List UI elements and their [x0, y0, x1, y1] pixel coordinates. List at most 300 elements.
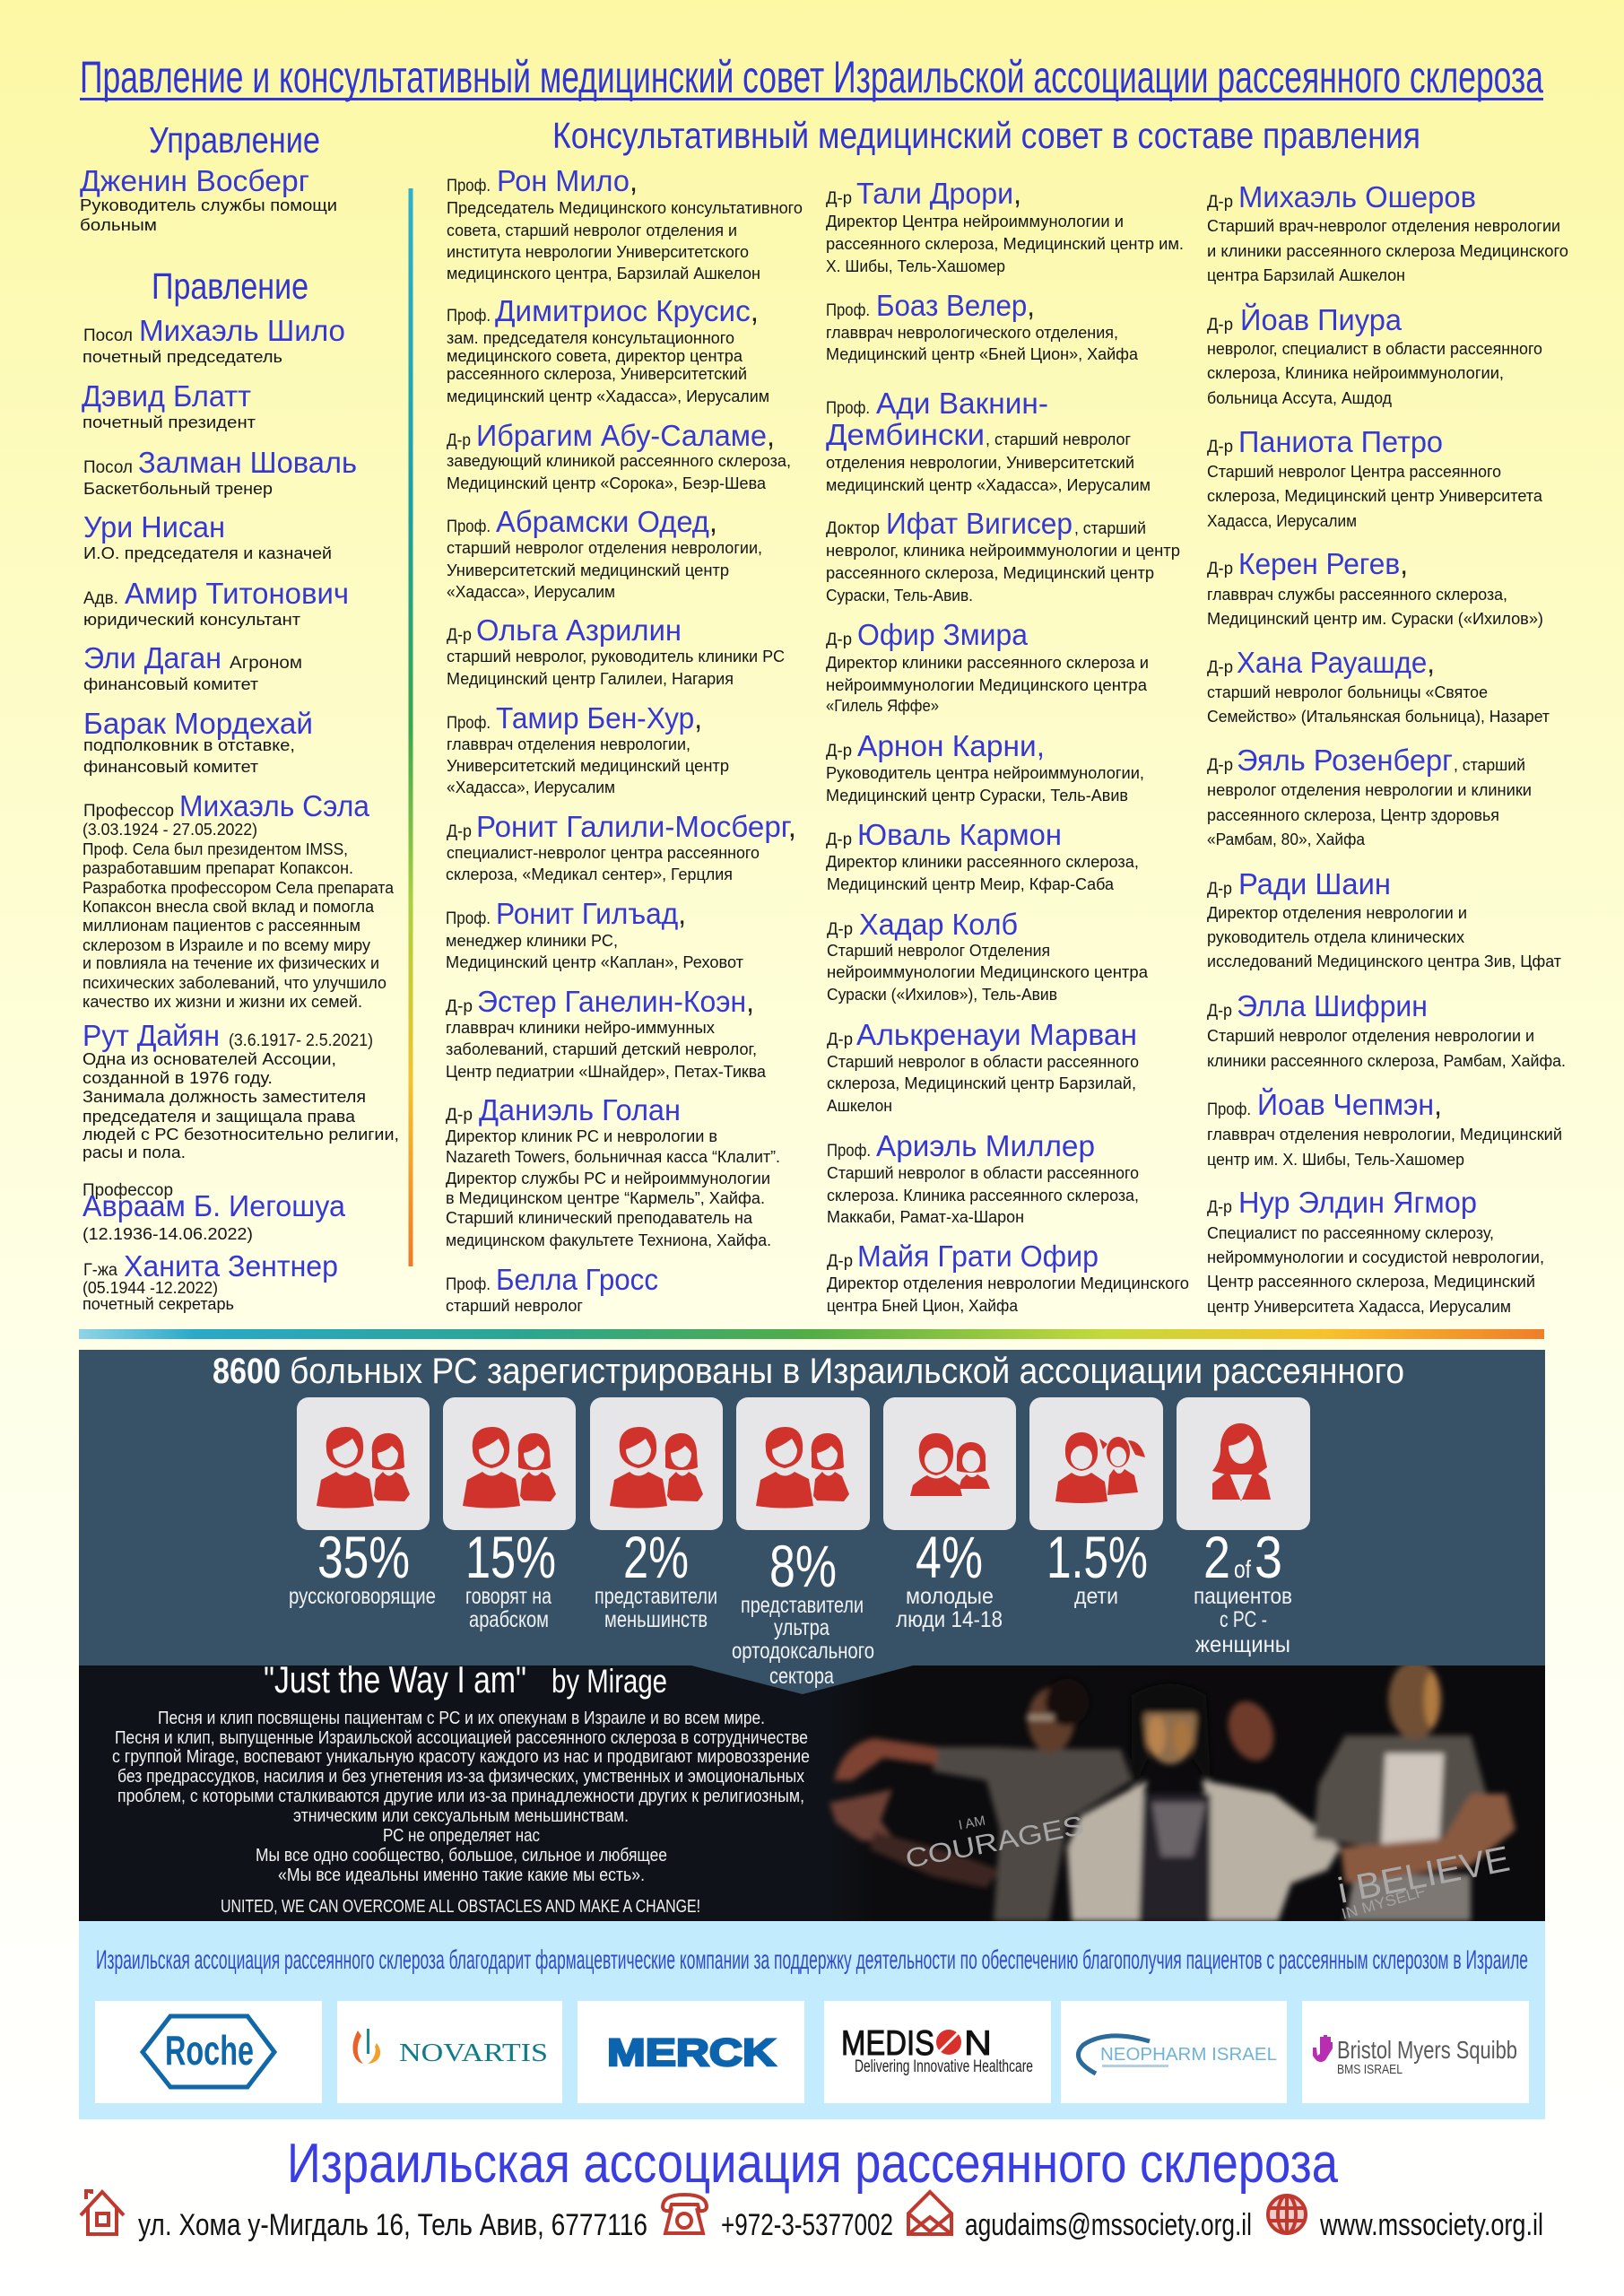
member: Михаэль Шило: Михаэль Шило [139, 314, 345, 347]
member: Ронит Галили-Мосберг: Ронит Галили-Мосберг, [476, 810, 796, 843]
member: Амир Титонович: Адв. [83, 589, 118, 608]
member: Михаэль Ошеров: Михаэль Ошеров [1238, 180, 1476, 213]
member: Ифат Вигисер: невролог, клиника нейроиммунологии и центр [826, 541, 1180, 560]
member: Элла Шифрин: Элла Шифрин [1237, 989, 1428, 1022]
member: Алькренауи Марван: склероза, Медицинский центр Барзилай, [827, 1074, 1136, 1092]
logo: Merck: MERCK [607, 2031, 776, 2074]
member: Эяль Розенберг: рассеянного склероза, Центр здоровья [1207, 805, 1499, 824]
member: Абрамски Одед: Абрамски Одед, [496, 505, 717, 538]
member: Ольга Азрилин: Д-р [447, 626, 472, 645]
member: Михаэль Ошеров: Д-р [1207, 193, 1233, 212]
member: Димитриос Крусис: зам. председателя консультационного [447, 328, 734, 347]
member: Паниота Петро: Д-р [1207, 438, 1233, 457]
member: Эстер Ганелин-Коэн: Д-р [446, 997, 473, 1016]
song description: UNITED, WE CAN OVERCOME ALL OBSTACLES AND MAKE A CHANGE! [221, 1897, 700, 1917]
logo: Neopharm Israel [1061, 2001, 1287, 2103]
member: Абрамски Одед: «Хадасса», Иерусалим [447, 582, 615, 601]
stat: 2 of 3 women: 2 [1203, 1524, 1230, 1590]
stat: 2% minorities: 2% [623, 1524, 689, 1590]
member: Керен Регев: Д-р [1207, 560, 1233, 578]
photo: three singers on stage: COURAGES [903, 1811, 1087, 1874]
member: Эяль Розенберг: «Рамбам, 80», Хайфа [1207, 830, 1366, 848]
member: Ради Шаин: руководитель отдела клинических [1207, 927, 1465, 946]
member: Ифат Вигисер: рассеянного склероза, Медицинский центр [826, 563, 1154, 582]
member: Ханита Зентнер: (05.1944 -12.2022) [83, 1278, 218, 1297]
member: Паниота Петро [1207, 425, 1543, 530]
stat: 2 of 3 women: of [1234, 1555, 1251, 1583]
member: Дженин Восберг: больным [80, 215, 157, 234]
member: Эстер Ганелин-Коэн [446, 985, 767, 1081]
member: Ради Шаин: исследований Медицинского центра Зив, Цфат [1207, 952, 1561, 970]
member: Майя Грати Офир: Директор отделения неврологии Медицинского [827, 1274, 1189, 1292]
member: Михаэль Ошеров: и клиники рассеянного склероза Медицинского [1207, 241, 1568, 260]
photo: three singers on stage: IN MYSELF [1340, 1883, 1427, 1923]
member: Залман Шоваль: Залман Шоваль [138, 446, 357, 479]
song description: Мы все одно сообщество, большое, сильное и любящее [256, 1846, 667, 1866]
member: Тамир Бен-Хур [447, 701, 729, 796]
member: Ольга Азрилин: старший невролог, руководитель клиники РС [447, 647, 785, 665]
member: Офир Змира: Д-р [826, 631, 852, 649]
logo: Neopharm Israel: NEOPHARM ISRAEL [1100, 2045, 1277, 2065]
icon: house [81, 2191, 124, 2234]
panel: dark video section [79, 1658, 1545, 1923]
song description: «Мы все идеальны именно такие какие мы есть». [278, 1866, 645, 1885]
member: Офир Змира: нейроиммунологии Медицинского центра [826, 675, 1148, 694]
song description: Песня и клип, выпущенные Израильской ассоциацией рассеянного склероза в сотрудничестве [115, 1728, 808, 1748]
member: Офир Змира: Директор клиники рассеянного склероза и [826, 653, 1149, 672]
member: Йоав Пиура: невролог, специалист в области рассеянного [1207, 339, 1542, 358]
address: ул. Хома у-Мигдаль 16, Тель Авив, 6777116 [138, 2208, 647, 2242]
member: Ронит Гилъад: менеджер клиники РС, [446, 931, 618, 950]
stat: 35% russian speakers: русскоговорящие [289, 1584, 436, 1609]
member: Залман Шоваль [83, 446, 357, 498]
member: Ифат Вигисер: Доктор [826, 519, 880, 538]
panel: sponsors [79, 1921, 1545, 2119]
panel: council column 3 [1207, 180, 1568, 1316]
member: Ифат Вигисер: Сураски, Тель-Авив. [826, 586, 973, 604]
stat: 15% arabic speakers [443, 1397, 576, 1632]
member: Даниэль Голан [446, 1093, 780, 1249]
member: Ибрагим Абу-Саламе [447, 419, 791, 492]
email: agudaims@mssociety.org.il [965, 2208, 1252, 2242]
member: Хана Рауашде: Семейство» (Итальянская больница), Назарет [1207, 707, 1550, 726]
member: Ради Шаин: Директор отделения неврологии и [1207, 903, 1467, 922]
member: Йоав Пиура [1207, 303, 1542, 407]
logo: Novartis [337, 2001, 562, 2103]
member: Элла Шифрин: Старший невролог отделения неврологии и [1207, 1026, 1534, 1045]
member: Эяль Розенберг: Д-р [1207, 756, 1233, 775]
member: Тамир Бен-Хур: главврач отделения неврологии, [447, 735, 690, 753]
stat: 2% minorities [590, 1397, 723, 1632]
member: Тали Дрори: Тали Дрори, [856, 177, 1021, 210]
member: Боаз Велер: Боаз Велер, [876, 289, 1035, 322]
member: Рут Дайян: (3.6.1917- 2.5.2021) [229, 1031, 373, 1050]
stat: 8% ultra-orthodox: сектора [769, 1664, 834, 1689]
member: Хадар Колб: Старший невролог Отделения [827, 941, 1050, 960]
stat: 8% ultra-orthodox: представители [741, 1593, 864, 1618]
member: Алькренауи Марван: Ашкелон [827, 1096, 892, 1115]
member: Арнон Карни: Медицинский центр Сураски, Тель-Авив [826, 786, 1128, 804]
member: Майя Грати Офир: Д-р [827, 1252, 853, 1271]
member: Нур Элдин Ягмор: Центр рассеянного склероза, Медицинский [1207, 1272, 1535, 1291]
member: Нур Элдин Ягмор: Д-р [1207, 1198, 1232, 1217]
member: Хадар Колб: Хадар Колб [859, 908, 1018, 941]
member: Арнон Карни [826, 729, 1144, 804]
member: Паниота Петро: Старший невролог Центра рассеянного [1207, 462, 1501, 481]
member: Тали Дрори [826, 177, 1184, 275]
member: Михаэль Сэла: качество их жизни и жизни их семей. [83, 992, 362, 1011]
stat: 4% young people: люди 14-18 [896, 1607, 1003, 1632]
member: Дэвид Блатт: почетный президент [83, 413, 256, 431]
stat: 2 of 3 women: пациентов [1194, 1584, 1292, 1609]
member: Белла Гросс: старший невролог [446, 1296, 583, 1315]
stat: 4% young people [883, 1397, 1016, 1632]
song title: by Mirage [551, 1663, 667, 1700]
member: Ольга Азрилин: Ольга Азрилин [476, 613, 682, 647]
member: Димитриос Крусис [447, 294, 769, 405]
member: Боаз Велер: Медицинский центр «Бней Цион», Хайфа [826, 344, 1139, 363]
photo: three singers on stage: i BELIEVE [1334, 1839, 1513, 1911]
member: Даниэль Голан: Даниэль Голан [479, 1093, 681, 1126]
member: Ради Шаин: Ради Шаин [1238, 867, 1391, 900]
stat: 15% arabic speakers: говорят на [465, 1584, 551, 1609]
member: Ольга Азрилин: Медицинский центр Галилеи, Нагария [447, 669, 734, 688]
member: Ариэль Миллер: Проф. [827, 1142, 871, 1161]
logo: Medison: Delivering Innovative Healthcare [855, 2057, 1033, 2076]
member: Барак Мордехай [83, 707, 313, 776]
member: Амир Титонович: юридический консультант [83, 610, 301, 629]
logo: Bristol Myers Squibb [1302, 2001, 1529, 2103]
member: Ури Нисан: И.О. председателя и казначей [83, 544, 332, 562]
member: Тамир Бен-Хур: «Хадасса», Иерусалим [447, 778, 615, 796]
member: Йоав Чепмэн: главврач отделения неврологии, Медицинский [1207, 1125, 1562, 1144]
footer title: Израильская ассоциация рассеянного склероза [287, 2133, 1338, 2195]
member: Йоав Пиура: больница Ассута, Ашдод [1207, 388, 1392, 407]
member: Михаэль Сэла: разработавшим препарат Копаксон. [83, 858, 353, 877]
member: Ронит Галили-Мосберг: Д-р [447, 822, 472, 841]
stat: 4% young people: молодые [906, 1584, 994, 1609]
member: Йоав Пиура: Д-р [1207, 316, 1233, 335]
member: Авраам Б. Иегошуа: Авраам Б. Иегошуа [83, 1189, 346, 1222]
member: Рут Дайян: расы и пола. [83, 1143, 186, 1161]
stat: 1.5% children: дети [1074, 1584, 1118, 1609]
member: Михаэль Шило: Посол [83, 326, 133, 345]
member: Эстер Ганелин-Коэн: Центр педиатрии «Шнайдер», Петах-Тиква [446, 1062, 767, 1081]
member: Ронит Галили-Мосберг [446, 810, 796, 883]
member: Керен Регев: Керен Регев, [1238, 547, 1408, 580]
panel: statistics [79, 1350, 1545, 1694]
member: Белла Гросс [446, 1263, 658, 1315]
stat: 1.5% children [1029, 1397, 1163, 1609]
member: Паниота Петро: Паниота Петро [1238, 425, 1443, 458]
member: Эли Даган [83, 641, 302, 693]
member: Тали Дрори: Х. Шибы, Тель-Хашомер [826, 257, 1005, 275]
member: Ифат Вигисер [826, 507, 1180, 604]
logo: Medison: MEDIS [841, 2024, 934, 2063]
member: Ади Вакнин-Дембински: Ади Вакнин- [876, 387, 1048, 420]
member: Белла Гросс: Проф. [446, 1275, 491, 1294]
stat: 2% minorities: меньшинств [604, 1607, 708, 1632]
member: Офир Змира: «Гилель Яффе» [826, 696, 939, 715]
member: Эли Даган: Эли Даган [83, 641, 221, 674]
member: Эяль Розенберг: , старший [1454, 755, 1525, 774]
logo: Roche: Roche [165, 2027, 254, 2074]
member: Авраам Б. Иегошуа [83, 1181, 346, 1243]
icon: telephone [663, 2195, 707, 2233]
panel: council column 1 [446, 164, 803, 1315]
member: Нур Элдин Ягмор: центр Университета Хадасса, Иерусалим [1207, 1297, 1511, 1316]
member: Ади Вакнин-Дембински: Дембински [826, 418, 985, 451]
heading: medical advisory council: Консультативный медицинский совет в составе правления [552, 115, 1420, 156]
member: Эяль Розенберг: невролог отделения неврологии и клиники [1207, 780, 1532, 799]
member: Амир Титонович: Амир Титонович [125, 577, 349, 610]
logo: Medison: N [964, 2024, 992, 2063]
member: Арнон Карни: Д-р [826, 742, 852, 761]
member: Рут Дайян [83, 1019, 399, 1161]
member: Боаз Велер: главврач неврологического отделения, [826, 323, 1118, 342]
member: Ронит Галили-Мосберг: специалист-невролог центра рассеянного [447, 843, 760, 862]
member: Дженин Восберг [80, 164, 337, 234]
panel: management column [80, 119, 399, 1313]
member: Ариэль Миллер: Маккаби, Рамат-ха-Шарон [827, 1207, 1024, 1226]
member: Абрамски Одед: Проф. [447, 517, 491, 536]
stat: 35% russian speakers: 35% [317, 1524, 410, 1590]
member: Паниота Петро: Хадасса, Иерусалим [1207, 511, 1357, 530]
member: Хадар Колб: Д-р [827, 920, 853, 939]
member: Ади Вакнин-Дембински: отделения неврологии, Университетский [826, 453, 1134, 472]
member: Тали Дрори: Д-р [826, 189, 852, 208]
member: Димитриос Крусис: Проф. [447, 307, 491, 326]
member: Эстер Ганелин-Коэн: Эстер Ганелин-Коэн, [477, 985, 754, 1018]
member: Офир Змира: Офир Змира [857, 618, 1029, 651]
member: Йоав Пиура: склероза, Клиника нейроиммунологии, [1207, 363, 1504, 382]
member: Арнон Карни: Арнон Карни, [857, 729, 1045, 762]
member: Йоав Чепмэн: Йоав Чепмэн, [1257, 1088, 1442, 1121]
member: Алькренауи Марван: Д-р [827, 1031, 853, 1049]
member: Даниэль Голан: Директор клиник РС и неврологии в [446, 1126, 717, 1145]
member: Хадар Колб: Сураски («Ихилов»), Тель-Авив [827, 985, 1057, 1004]
stat: 2 of 3 women: женщины [1195, 1632, 1290, 1657]
member: Нур Элдин Ягмор: нейроммунологии и сосудистой неврологии, [1207, 1248, 1544, 1266]
member: Рут Дайян: Одна из основателей Ассоции, [83, 1049, 336, 1068]
member: Керен Регев: главврач службы рассеянного склероза, [1207, 585, 1507, 604]
member: Офир Змира [826, 618, 1149, 715]
member: Юваль Кармон: Медицинский центр Меир, Кфар-Саба [827, 874, 1115, 893]
stat: 2 of 3 women: с РС - [1220, 1607, 1267, 1632]
member: Юваль Кармон [826, 818, 1139, 893]
member: Эли Даган: Агроном [230, 654, 302, 673]
member: Юваль Кармон: Д-р [826, 831, 852, 849]
footer contacts [81, 2191, 1543, 2242]
member: Рон Мило: Председатель Медицинского консультативного [447, 198, 803, 217]
member: Абрамски Одед [447, 505, 762, 601]
member: Белла Гросс: Белла Гросс [496, 1263, 658, 1296]
stat: 1.5% children: 1.5% [1046, 1524, 1148, 1590]
member: Рут Дайян: созданной в 1976 году. [83, 1068, 273, 1087]
member: Боаз Велер: Проф. [826, 301, 870, 320]
member: Даниэль Голан: в Медицинском центре “Кармель”, Хайфа. [446, 1188, 765, 1207]
member: Михаэль Сэла: психических заболеваний, что улучшило [83, 973, 386, 992]
member: Ханита Зентнер: Г-жа [83, 1261, 117, 1280]
website: www.mssociety.org.il [1319, 2208, 1543, 2242]
member: Михаэль Ошеров: Старший врач-невролог отделения неврологии [1207, 216, 1560, 235]
member: Рут Дайян: Рут Дайян [83, 1019, 220, 1052]
member: Рут Дайян: Занимала должность заместителя [83, 1087, 366, 1106]
member: Ибрагим Абу-Саламе: Д-р [447, 431, 471, 450]
member: Даниэль Голан: Д-р [446, 1106, 473, 1125]
member: Димитриос Крусис: рассеянного склероза, Университетский [447, 364, 747, 383]
member: Ади Вакнин-Дембински: Проф. [826, 399, 870, 418]
member: Амир Титонович [83, 577, 349, 629]
member: Рон Мило [447, 164, 803, 283]
member: Ариэль Миллер [827, 1129, 1139, 1226]
member: Ибрагим Абу-Саламе: Медицинский центр «Сорока», Беэр-Шева [447, 474, 767, 492]
stat: 8% ultra-orthodox: ультра [774, 1615, 829, 1640]
member: Ронит Гилъад: Проф. [446, 909, 491, 928]
member: Йоав Чепмэн [1207, 1088, 1562, 1169]
member: Михаэль Сэла: миллионам пациентов с рассеянным [83, 916, 360, 935]
member: Эяль Розенберг [1207, 744, 1532, 848]
stats heading: больных РС зарегистрированы в Израильской ассоциации рассеянного [290, 1352, 1404, 1391]
song description: с группой Mirage, воспевают уникальную красоту каждого из нас и продвигают мировоззрение [112, 1747, 810, 1767]
member: Ронит Гилъад: Ронит Гилъад, [496, 897, 686, 930]
icon: envelope [908, 2192, 951, 2234]
icon: young people [910, 1433, 990, 1496]
member: Рон Мило: медицинского центра, Барзилай Ашкелон [447, 264, 760, 283]
member: Даниэль Голан: Nazareth Towers, больничная касса “Клалит”. [446, 1147, 780, 1166]
song description: этническим или сексуальным меньшинствам. [293, 1806, 629, 1826]
member: Тали Дрори: рассеянного склероза, Медицинский центр им. [826, 234, 1184, 253]
member: Йоав Чепмэн: центр им. Х. Шибы, Тель-Хашомер [1207, 1150, 1464, 1169]
member: Тали Дрори: Директор Центра нейроиммунологии и [826, 212, 1124, 230]
member: Михаэль Шило: почетный председатель [83, 347, 282, 366]
member: Элла Шифрин [1207, 989, 1566, 1070]
member: Михаэль Сэла: и повлияла на течение их физических и [83, 953, 379, 972]
member: Ариэль Миллер: Ариэль Миллер [876, 1129, 1095, 1162]
member: Ибрагим Абу-Саламе: заведующий клиникой рассеянного склероза, [447, 451, 791, 470]
member: Димитриос Крусис: медицинского совета, директор центра [447, 346, 743, 365]
member: Михаэль Сэла [83, 789, 395, 1011]
member: Ронит Гилъад: Медицинский центр «Каплан», Реховот [446, 952, 744, 971]
stat: 8% ultra-orthodox: 8% [769, 1533, 837, 1599]
member: Хана Рауашде: старший невролог больницы «Святое [1207, 683, 1488, 701]
member: Ханита Зентнер: Ханита Зентнер [124, 1249, 338, 1283]
member: Барак Мордехай: подполковник в отставке, [83, 735, 295, 754]
member: Ради Шаин: Д-р [1207, 880, 1232, 899]
member: Тамир Бен-Хур: Университетский медицинский центр [447, 756, 729, 775]
member: Дженин Восберг: Руководитель службы помощи [80, 196, 337, 214]
member: Ронит Гилъад [446, 897, 744, 971]
stat: 4% young people: 4% [916, 1524, 983, 1590]
song description: РС не определяет нас [383, 1826, 540, 1846]
member: Рут Дайян: людей с РС безотносительно религии, [83, 1125, 399, 1144]
member: Боаз Велер [826, 289, 1139, 363]
phone number: +972-3-5377002 [721, 2208, 893, 2242]
photo: three singers on stage [825, 1660, 1545, 1923]
member: Юваль Кармон: Директор клиники рассеянного склероза, [826, 852, 1139, 871]
stats heading: 8600 [213, 1352, 281, 1391]
member: Ифат Вигисер: , старший [1074, 518, 1146, 537]
photo: three singers on stage: I AM [958, 1813, 986, 1833]
member: Ронит Галили-Мосберг: склероза, «Медикал сентер», Герцлия [446, 865, 733, 883]
member: Михаэль Сэла: Разработка профессором Села препарата [83, 878, 395, 897]
member: Авраам Б. Иегошуа: Профессор [83, 1181, 173, 1200]
member: Элла Шифрин: клиники рассеянного склероза, Рамбам, Хайфа. [1207, 1051, 1566, 1070]
member: Михаэль Сэла: Михаэль Сэла [179, 789, 370, 822]
song description: Песня и клип посвящены пациентам с РС и их опекунам в Израиле и во всем мире. [158, 1709, 765, 1728]
member: Рон Мило: совета, старший невролог отделения и [447, 221, 737, 239]
member: Керен Регев [1207, 547, 1543, 628]
member: Михаэль Сэла: Копаксон внесла свой вклад и помогла [83, 897, 375, 916]
icon: globe [1268, 2196, 1306, 2233]
stat: 8% ultra-orthodox [732, 1397, 874, 1689]
member: Даниэль Голан: медицинском факультете Техниона, Хайфа. [446, 1231, 771, 1249]
member: Ади Вакнин-Дембински [826, 387, 1151, 494]
stat: 2 of 3 women: 3 [1255, 1524, 1282, 1590]
member: Дэвид Блатт [82, 379, 256, 431]
member: Эяль Розенберг: Эяль Розенберг [1237, 744, 1453, 777]
member: Майя Грати Офир: Майя Грати Офир [857, 1239, 1099, 1273]
logo: Bristol Myers Squibb: BMS ISRAEL [1337, 2062, 1403, 2077]
stat: 15% arabic speakers: 15% [465, 1524, 556, 1590]
member: Алькренауи Марван: Старший невролог в области рассеянного [827, 1052, 1139, 1071]
member: Дэвид Блатт: Дэвид Блатт [82, 379, 251, 413]
logo: Medison [824, 2001, 1051, 2103]
member: Нур Элдин Ягмор: Нур Элдин Ягмор [1238, 1186, 1477, 1219]
member: Ханита Зентнер: почетный секретарь [83, 1294, 234, 1313]
member: Юваль Кармон: Юваль Кармон [857, 818, 1062, 851]
member: Алькренауи Марван [827, 1018, 1139, 1115]
member: Тамир Бен-Хур: Проф. [447, 714, 491, 733]
song description: проблем, с которыми сталкиваются другие или из-за принадлежности других к религиозным, [117, 1787, 804, 1806]
heading: management: Управление [149, 119, 320, 161]
heading: board: Правление [152, 265, 308, 307]
member: Залман Шоваль: Баскетбольный тренер [83, 479, 273, 498]
song title: "Just the Way I am" [264, 1658, 526, 1700]
member: Паниота Петро: склероза, Медицинский центр Университета [1207, 486, 1543, 505]
member: Михаэль Ошеров [1207, 180, 1568, 284]
song description: без предрассудков, насилия и без угнетения из-за физических, умственных и эмоциональных [117, 1767, 804, 1787]
stat: 8% ultra-orthodox: ортодоксального [732, 1639, 874, 1664]
member: Рут Дайян: председателя и защищала права [83, 1107, 356, 1126]
member: Даниэль Голан: Директор службы РС и нейроиммунологии [446, 1169, 770, 1187]
logo: Bristol Myers Squibb: Bristol Myers Squibb [1337, 2036, 1517, 2064]
member: Алькренауи Марван: Алькренауи Марван [856, 1018, 1137, 1051]
member: Ариэль Миллер: склероза. Клиника рассеянного склероза, [827, 1186, 1139, 1205]
member: Элла Шифрин: Д-р [1207, 1002, 1232, 1021]
member: Керен Регев: Медицинский центр им. Сураски («Ихилов») [1207, 609, 1543, 628]
member: Михаэль Ошеров: центра Барзилай Ашкелон [1207, 265, 1405, 284]
member: Дженин Восберг: Дженин Восберг [80, 164, 309, 197]
member: Хана Рауашде [1207, 646, 1550, 726]
stat: 15% arabic speakers: арабском [469, 1607, 549, 1632]
member: Арнон Карни: Руководитель центра нейроиммунологии, [826, 763, 1144, 782]
member: Михаэль Шило [83, 314, 345, 366]
member: Ури Нисан [83, 510, 332, 562]
member: Ольга Азрилин [447, 613, 785, 688]
member: Йоав Чепмэн: Проф. [1207, 1100, 1251, 1119]
member: Тамир Бен-Хур: Тамир Бен-Хур, [496, 701, 702, 735]
member: Нур Элдин Ягмор [1207, 1186, 1544, 1316]
member: Залман Шоваль: Посол [83, 458, 133, 477]
song description [112, 1709, 810, 1917]
stat: 2 of 3 women [1177, 1397, 1310, 1657]
member: Абрамски Одед: старший невролог отделения неврологии, [447, 538, 762, 557]
member: Хана Рауашде: Д-р [1207, 658, 1233, 677]
member: Йоав Пиура: Йоав Пиура [1240, 303, 1403, 336]
logo: Roche [95, 2001, 322, 2103]
member: Барак Мордехай: Барак Мордехай [83, 707, 313, 740]
